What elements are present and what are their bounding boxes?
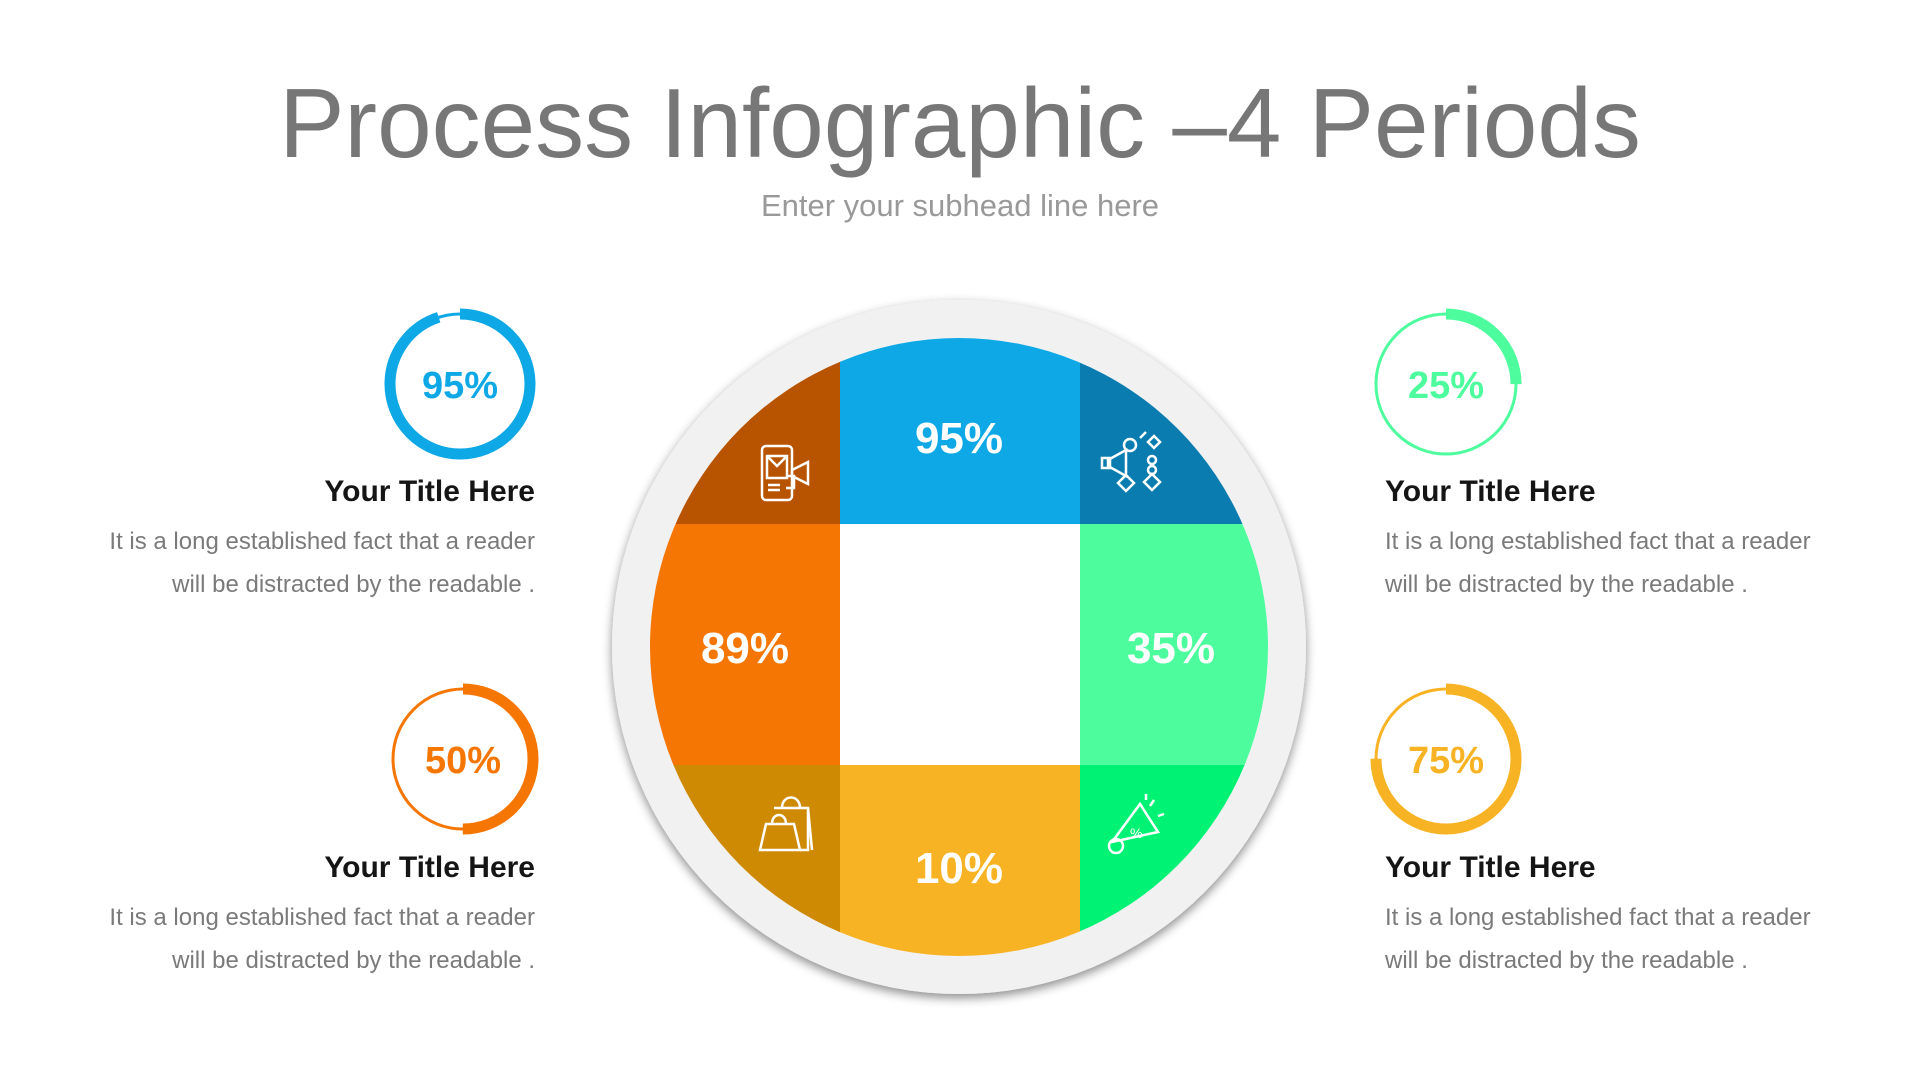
- subtitle: Enter your subhead line here: [761, 188, 1159, 223]
- text block: bottom left: [109, 851, 535, 974]
- text block: bottom right: Your Title Here: [1385, 851, 1596, 884]
- text block: top right: It is a long established fact that a reader: [1385, 528, 1811, 555]
- text block: top right: will be distracted by the readable .: [1385, 571, 1748, 598]
- main graphic: [384, 297, 1522, 1005]
- text block: bottom left: Your Title Here: [324, 851, 535, 884]
- ring 50: 50%: [425, 740, 501, 782]
- text block: bottom left: will be distracted by the readable .: [172, 947, 535, 974]
- segment labels: 95%: [915, 414, 1003, 463]
- ring 50: [393, 689, 533, 829]
- text block: top right: [1385, 475, 1811, 598]
- icon: marketing: [1102, 432, 1160, 491]
- text block: bottom left: It is a long established fact that a reader: [109, 904, 535, 931]
- text block: top left: Your Title Here: [324, 475, 535, 508]
- segment labels: 10%: [915, 844, 1003, 893]
- ring 25: 25%: [1408, 365, 1484, 407]
- text block: top left: will be distracted by the readable .: [172, 571, 535, 598]
- segmented circle: [640, 330, 1280, 965]
- text block: top left: [109, 475, 535, 598]
- text block: bottom right: [1385, 851, 1811, 974]
- text block: bottom right: will be distracted by the readable .: [1385, 947, 1748, 974]
- outer ring: [612, 300, 1306, 994]
- segment labels: 35%: [1127, 624, 1215, 673]
- text block: top left: It is a long established fact that a reader: [109, 528, 535, 555]
- title: Process Infographic –4 Periods: [279, 68, 1641, 178]
- ring 95: 95%: [422, 365, 498, 407]
- ring 75: [1376, 689, 1516, 829]
- icon: phone megaphone: [762, 446, 808, 500]
- text block: top right: Your Title Here: [1385, 475, 1596, 508]
- ring 25: [1376, 314, 1516, 454]
- icon: shopping bags: [760, 798, 812, 850]
- ring 75: 75%: [1408, 740, 1484, 782]
- icon: sale megaphone: %: [1130, 825, 1142, 841]
- segment labels: 89%: [701, 624, 789, 673]
- text block: bottom right: It is a long established fact that a reader: [1385, 904, 1811, 931]
- segment labels: [701, 414, 1215, 893]
- icon: sale megaphone: [1109, 794, 1164, 853]
- ring 95: [390, 314, 530, 454]
